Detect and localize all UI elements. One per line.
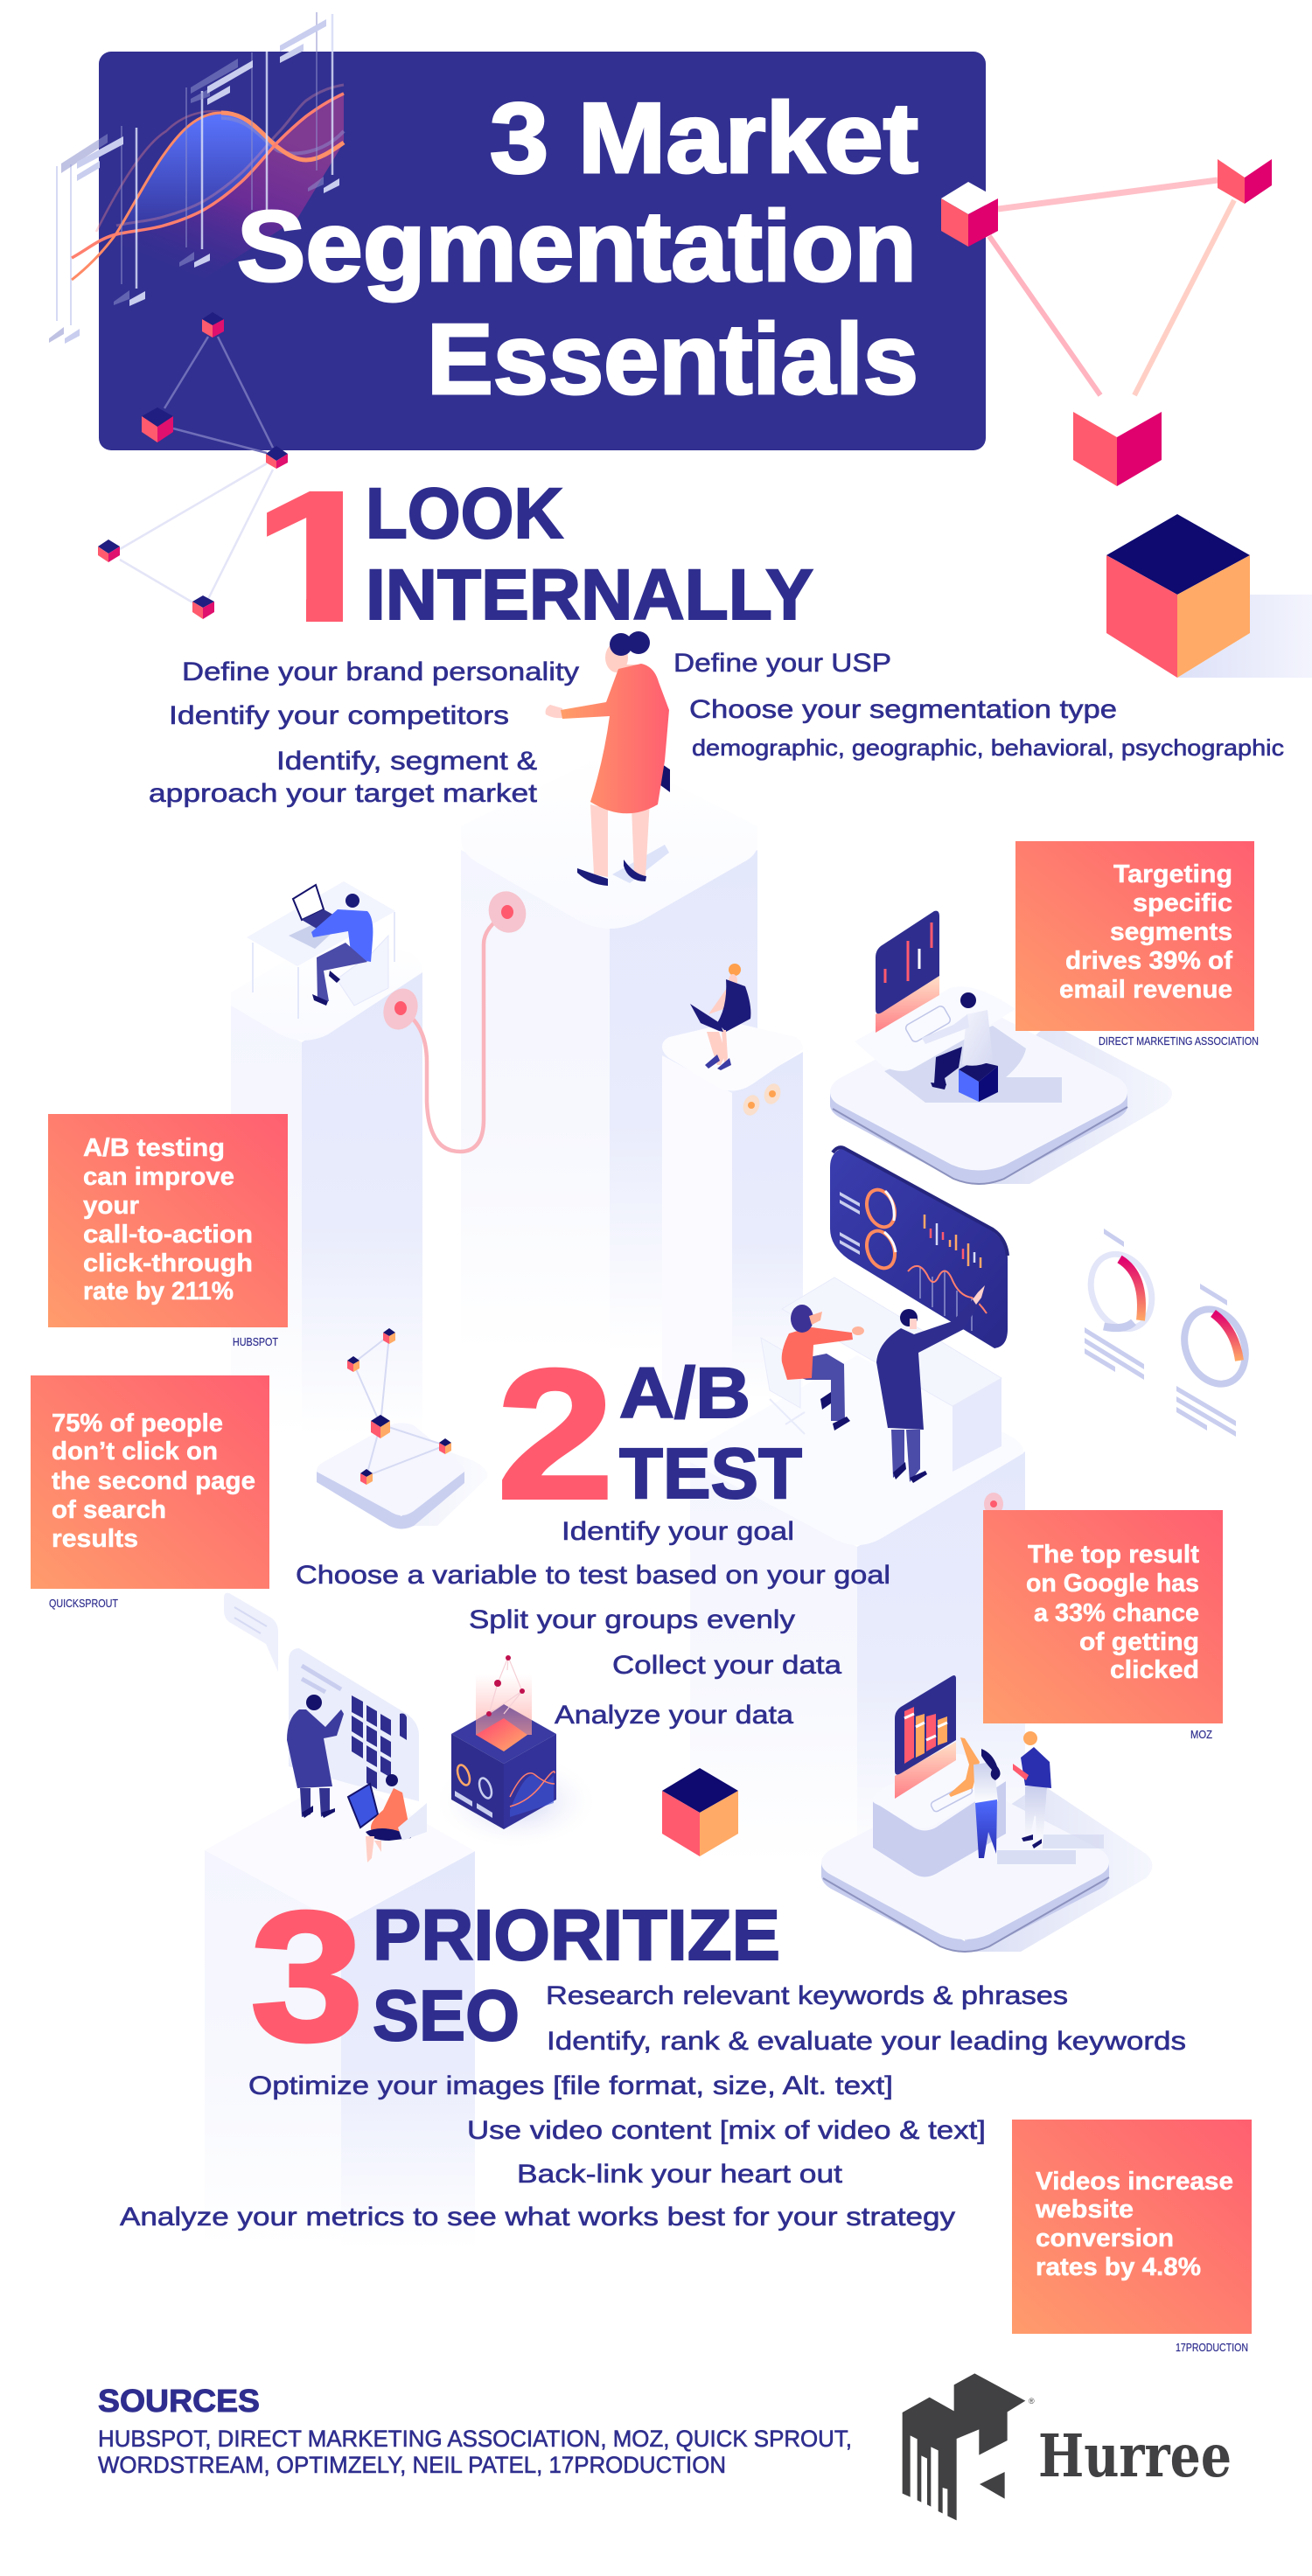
- title: [237, 83, 918, 415]
- stat box: A/B testing: A/B testing: [83, 1134, 225, 1162]
- figure: man pointing at dashboard: [876, 1285, 985, 1483]
- stat box: A/B testing: [48, 1114, 288, 1327]
- section 1 list: Define your USP: [673, 649, 891, 678]
- source label: hubspot: HUBSPOT: [233, 1335, 278, 1348]
- sources: HUBSPOT, DIRECT MARKETING ASSOCIATION, MOZ, QUICK SPROUT,: [98, 2426, 852, 2452]
- logo: Hurree: ®: [1029, 2397, 1035, 2405]
- section 1 list: [149, 649, 1284, 808]
- section 2 list: [296, 1517, 890, 1730]
- section 2 list: Split your groups evenly: [469, 1605, 795, 1634]
- figure: seated woman: [761, 1305, 864, 1434]
- section 1 list: Choose your segmentation type: [689, 695, 1117, 724]
- data cube: [433, 1655, 599, 1849]
- network: pink triangle with cubes: [941, 159, 1272, 486]
- section 3 heading: 3: [250, 1873, 364, 2079]
- section 1 number: 1: [253, 453, 386, 659]
- section 2 heading: TEST: [619, 1434, 802, 1514]
- section 3 list: [120, 1981, 1186, 2231]
- stat box: email revenue: drives 39% of: [1065, 947, 1232, 975]
- stat box: second page of search: of search: [52, 1496, 166, 1524]
- source label: direct marketing association: DIRECT MARKETING ASSOCIATION: [1099, 1034, 1259, 1048]
- section 2 list: Identify your goal: [562, 1517, 794, 1546]
- stat box: A/B testing: your: [83, 1192, 139, 1220]
- stat box: top result on Google: The top result: [1028, 1541, 1199, 1569]
- network: cubes on panel: [98, 312, 288, 619]
- section 1 list: Define your brand personality: [182, 658, 579, 686]
- section 3 heading: PRIORITIZE: [373, 1896, 780, 1975]
- icon: donut charts: [1080, 1229, 1256, 1437]
- section 3 list: Identify, rank & evaluate your leading keywords: [547, 2027, 1186, 2056]
- section 1 list: approach your target market: [149, 779, 538, 808]
- sources: [98, 2383, 852, 2478]
- sources: WORDSTREAM, OPTIMZELY, NEIL PATEL, 17PRODUCTION: [98, 2452, 726, 2478]
- icon: small cube: [662, 1768, 738, 1856]
- section 1 list: Identify, segment &: [276, 747, 537, 776]
- section 3 list: Research relevant keywords & phrases: [546, 1981, 1068, 2010]
- stat box: second page of search: results: [52, 1525, 138, 1553]
- section 2 heading: [497, 1331, 802, 1537]
- podium: right small column: [662, 1022, 803, 1399]
- stat box: second page of search: 75% of people: [52, 1410, 223, 1438]
- section 1 list: demographic, geographic, behavioral, psychographic: [692, 735, 1284, 761]
- source label: 17production: 17PRODUCTION: [1176, 2341, 1248, 2354]
- podium: A/B column: [690, 1355, 1025, 1862]
- sources: SOURCES: [98, 2383, 260, 2419]
- title: Essentials: [427, 304, 918, 415]
- stat box: video conversion: website: [1035, 2196, 1134, 2224]
- section 2 heading: 2: [497, 1331, 614, 1537]
- stat box: A/B testing: rate by 211%: [83, 1278, 234, 1305]
- dashboard screen: [830, 1147, 1008, 1348]
- stat box: email revenue: email revenue: [1059, 976, 1232, 1004]
- stat box: top result on Google: of getting: [1079, 1628, 1199, 1656]
- stat box: email revenue: specific: [1133, 889, 1232, 917]
- stat box: A/B testing: call-to-action: [83, 1221, 253, 1249]
- figure: woman with laptop on small podium: [690, 964, 750, 1070]
- network platform: [317, 1328, 487, 1528]
- source label: quicksprout: QUICKSPROUT: [49, 1597, 118, 1610]
- platform: upper right with desk and man: [830, 911, 1172, 1184]
- figure: man at laptop on left podium: [247, 881, 395, 1019]
- source label: moz: MOZ: [1190, 1728, 1212, 1741]
- stat box: top result on Google: a 33% chance: [1034, 1599, 1199, 1627]
- logo: Hurree: [903, 2373, 1232, 2520]
- title: Segmentation: [237, 191, 917, 303]
- figure: woman standing: [546, 631, 670, 886]
- podium: bottom-left column: [205, 1775, 475, 2247]
- stat box: video conversion: conversion: [1036, 2224, 1174, 2252]
- chart: flowing curves over the panel: [49, 12, 344, 344]
- stat box: video conversion: rates by 4.8%: [1036, 2253, 1201, 2281]
- section 3 list: Back-link your heart out: [517, 2160, 843, 2189]
- stat box: top result on Google: on Google has: [1026, 1570, 1199, 1598]
- section 2 list: Analyze your data: [555, 1701, 793, 1730]
- logo: Hurree: Hurree: [1038, 2421, 1232, 2490]
- stat box: video conversion: [1012, 2120, 1252, 2334]
- title panel: [99, 52, 986, 450]
- stat box: top result on Google: clicked: [1110, 1656, 1199, 1684]
- section 1 heading: [366, 474, 813, 635]
- stat box: email revenue: [1015, 841, 1254, 1031]
- stat box: A/B testing: can improve: [83, 1163, 234, 1191]
- podium: left column: [231, 936, 422, 1434]
- section 3 heading: [250, 1873, 780, 2079]
- section 2 list: Collect your data: [612, 1651, 841, 1680]
- wires between podiums: [378, 886, 1003, 1515]
- section 2 heading: A/B: [619, 1354, 750, 1433]
- stat box: email revenue: segments: [1110, 918, 1232, 946]
- platform: A/B table: [782, 1278, 1001, 1472]
- platform: lower right with monitor and people: [821, 1675, 1153, 1952]
- speech bubble: [224, 1593, 278, 1672]
- section 3 list: Optimize your images [file format, size, Alt. text]: [248, 2071, 893, 2100]
- icon: large cube with shadow: [1106, 514, 1312, 678]
- stat box: A/B testing: click-through: [83, 1250, 253, 1278]
- section 3 list: Use video content [mix of video & text]: [467, 2116, 986, 2145]
- section 2 list: Choose a variable to test based on your goal: [296, 1561, 890, 1590]
- section 1 heading: INTERNALLY: [366, 555, 813, 635]
- stat box: second page of search: the second page: [52, 1467, 255, 1495]
- stat box: second page of search: don’t click on: [52, 1438, 218, 1466]
- stat box: video conversion: Videos increase: [1036, 2168, 1233, 2196]
- stat box: email revenue: Targeting: [1113, 860, 1232, 888]
- stat box: second page of search: [31, 1375, 269, 1589]
- section 3 list: Analyze your metrics to see what works best for your strategy: [120, 2203, 955, 2231]
- board with man and woman: [287, 1648, 427, 1862]
- podium: centre column: [461, 752, 757, 1351]
- section 3 heading: SEO: [373, 1976, 520, 2056]
- section 1 heading: LOOK: [366, 474, 563, 553]
- stat box: top result on Google: [983, 1510, 1223, 1723]
- title: 3 Market: [490, 83, 918, 194]
- section 1 list: Identify your competitors: [169, 701, 509, 730]
